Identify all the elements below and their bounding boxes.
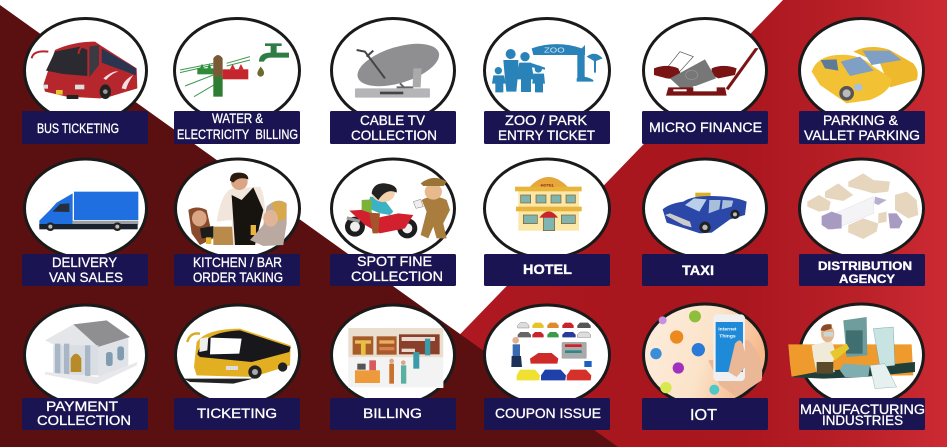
label: VAN SALES	[49, 270, 123, 285]
icon: shop counter and shelves	[348, 328, 443, 388]
icon: blue taxi	[663, 193, 747, 233]
label	[22, 254, 148, 286]
icon: hands exchanging money over laptop	[654, 48, 758, 96]
panel: bus ticketing	[22, 18, 148, 144]
label: TAXI	[682, 263, 714, 278]
label: PARKING &	[823, 113, 898, 128]
label: COLLECTION	[37, 413, 131, 428]
label: SPOT FINE	[357, 254, 432, 269]
label	[174, 111, 300, 144]
icon: waiter serving guests	[188, 173, 287, 246]
label: ZOO / PARK	[505, 113, 587, 128]
label: DELIVERY	[52, 255, 117, 270]
label	[174, 254, 300, 286]
icon: factory worker at machine	[788, 317, 915, 389]
panel: spot fine collection	[330, 159, 456, 286]
panel: taxi	[642, 159, 768, 286]
icon: blue delivery van	[39, 192, 138, 231]
panel: parking and valet parking	[799, 18, 925, 144]
label: ORDER TAKING	[193, 270, 283, 285]
icon: bank building	[45, 320, 137, 384]
label: WATER &	[212, 111, 263, 126]
label: COUPON ISSUE	[495, 406, 601, 421]
panel: iot	[642, 304, 768, 430]
panel: micro finance	[642, 18, 768, 144]
label: INDUSTRIES	[822, 413, 903, 428]
icon: truck with warehouse boxes	[807, 173, 918, 239]
panel: hotel	[484, 159, 610, 286]
label	[330, 254, 456, 286]
label: MANUFACTURING	[800, 402, 925, 417]
background: dark maroon wedge	[0, 5, 618, 447]
panel: ticketing	[174, 305, 300, 430]
panel: zoo entry ticket	[484, 18, 610, 144]
label: PAYMENT	[46, 399, 118, 414]
label: MICRO FINANCE	[649, 120, 762, 135]
icon: hand holding phone with internet of things: Things	[719, 334, 736, 340]
icon: hand holding phone with internet of things: Internet	[718, 326, 737, 332]
label: ELECTRICITY BILLING	[177, 127, 298, 142]
label: COLLECTION	[351, 269, 443, 284]
icon: hand holding phone with internet of things	[650, 310, 762, 397]
label: BILLING	[363, 406, 422, 421]
label: IOT	[690, 407, 717, 424]
label: DISTRIBUTION	[818, 259, 912, 273]
panel: kitchen bar order taking	[174, 159, 300, 286]
label: AGENCY	[839, 272, 895, 286]
panel: billing	[330, 305, 456, 430]
panel: water and electricity billing	[174, 18, 300, 144]
icon: family at zoo gate: ZOO	[544, 45, 565, 54]
panel: cable tv collection	[330, 18, 456, 144]
label: COLLECTION	[351, 128, 437, 143]
label	[799, 111, 925, 144]
label: TICKETING	[197, 406, 277, 421]
panel: coupon issue	[484, 305, 610, 430]
icon: pole and tap	[180, 43, 289, 97]
label	[799, 254, 925, 286]
icon: yellow bus	[183, 329, 291, 384]
panel: payment collection	[22, 305, 148, 430]
label: ENTRY TICKET	[498, 128, 595, 143]
background: red wedge	[440, 0, 947, 447]
label: VALLET PARKING	[804, 128, 920, 143]
label	[330, 111, 456, 144]
label: HOTEL	[523, 262, 572, 277]
icon: parking lot with attendant	[511, 323, 592, 380]
label	[22, 398, 148, 430]
panel: distribution agency	[799, 159, 925, 286]
icon: policeman fining motorcyclist	[345, 178, 450, 238]
label	[799, 398, 925, 430]
panel: delivery van sales	[22, 159, 148, 286]
icon: red bus	[32, 42, 137, 99]
icon: satellite dish	[353, 35, 444, 98]
label: BUS TICKETING	[37, 121, 119, 136]
icon: two yellow cars	[812, 47, 918, 103]
label: KITCHEN / BAR	[193, 255, 282, 270]
panel: manufacturing industries	[788, 304, 925, 430]
label: CABLE TV	[360, 113, 425, 128]
icon: hotel building: HOTEL	[541, 183, 555, 188]
label	[484, 111, 610, 144]
